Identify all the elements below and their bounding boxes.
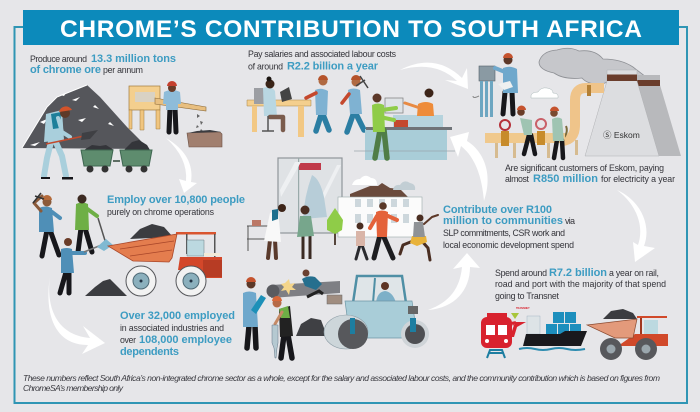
- text: community contribution: SLP commitments, CSR work and: [443, 228, 565, 238]
- counter: [354, 98, 455, 160]
- miner with shovel, blue shirt: [60, 238, 113, 293]
- text: community contribution: via: [565, 216, 575, 226]
- text: Eskom spend: almost: [505, 174, 530, 184]
- panel: [473, 66, 495, 117]
- ore cart 2: [113, 140, 152, 172]
- Eskom logo: Ⓢ Eskom: [603, 130, 640, 140]
- illustration: family and running child: [356, 202, 438, 260]
- text: logistics spend: road and port with the majority of that spend: [495, 279, 666, 289]
- text: salaries: [248, 49, 397, 72]
- text: Eskom spend: Are significant customers of Eskom, paying: [505, 163, 664, 173]
- illustration: three miners: [33, 193, 113, 293]
- text: associated employment: dependents: [120, 346, 179, 358]
- text: employment: [107, 194, 245, 217]
- tree: [327, 208, 343, 245]
- illustration: conveyor and worker with crate: [129, 81, 222, 147]
- text: chrome ore production: per annum: [103, 65, 143, 75]
- text: Eskom spend: for electricity a year: [601, 174, 675, 184]
- blue overall worker: [306, 75, 329, 131]
- miner with pick: [342, 75, 368, 132]
- illustration: cloud of smoke: [539, 48, 650, 84]
- text: chrome ore production: [30, 53, 176, 76]
- illustration: small white cloud: [531, 88, 558, 98]
- child in green dress: [297, 206, 314, 259]
- illustration: Transnet train: TRANSNET: [516, 307, 530, 310]
- text: chrome ore production: of chrome ore: [30, 64, 101, 76]
- arrows between stages: [48, 63, 655, 354]
- worker at right valve: [550, 106, 564, 158]
- text: Eskom spend: R850 million: [533, 173, 598, 185]
- person with jackhammer: [272, 296, 293, 358]
- text: logistics spend: Spend around: [495, 268, 547, 278]
- text: salaries: of around: [248, 62, 283, 72]
- illustration: school building with tree: [327, 176, 422, 245]
- ore pile behind roller: [296, 318, 327, 336]
- text: associated employment: over: [120, 335, 136, 345]
- text: associated employment: [120, 310, 235, 358]
- illustration: Eskom cooling towers: [585, 70, 681, 156]
- text: community contribution: [443, 204, 575, 250]
- miner with pick: [33, 193, 60, 256]
- text: community contribution: million to communities: [443, 215, 563, 227]
- footnote: [23, 373, 660, 393]
- man with clipboard: [243, 277, 266, 348]
- text: logistics spend: [495, 267, 666, 301]
- text: logistics spend: R7.2 billion: [549, 267, 607, 279]
- text: community contribution: Contribute over R100: [443, 204, 552, 216]
- title banner: CHROME’S CONTRIBUTION TO SOUTH AFRICA: [60, 16, 642, 43]
- seated worker: [254, 76, 292, 131]
- text: chrome ore production: Produce around: [30, 54, 87, 64]
- footnote: ChromeSA’s membership only: [23, 383, 124, 393]
- orange worker: [405, 88, 434, 116]
- text: salaries: Pay salaries and associated labour costs: [248, 49, 397, 59]
- text: associated employment: in associated industries and: [120, 323, 224, 333]
- text: Eskom spend: [505, 163, 675, 185]
- text: logistics spend: a year on rail,: [609, 268, 659, 278]
- text: associated employment: 108,000 employee: [139, 334, 232, 346]
- title banner: [23, 10, 679, 45]
- text: employment: Employ over 10,800 people: [107, 194, 245, 206]
- illustration: orange mining truck: [108, 224, 222, 296]
- miner in green: [75, 194, 107, 252]
- illustration: clinic glass building with nurse and child: [247, 158, 342, 259]
- adult in orange: [370, 202, 397, 258]
- text: associated employment: Over 32,000 employed: [120, 310, 235, 322]
- running child: [400, 214, 438, 260]
- worker with clipboard: [495, 53, 518, 114]
- illustration: small orange truck: [587, 309, 668, 360]
- small child: [356, 222, 367, 259]
- illustration: ore heap with miner and carts: [22, 85, 152, 180]
- nurse: [264, 204, 286, 258]
- illustration: road roller with driver: [324, 276, 429, 349]
- footnote: These numbers reflect South Africa’s non-integrated chrome sector as a whole, except for the salary and associated labour costs, and the community contribution which is based on figures from: [23, 373, 660, 383]
- pipe with spark and welder: [266, 270, 342, 304]
- illustration: pipework with valves and workers: [485, 85, 604, 158]
- illustration: container ship: [519, 312, 587, 350]
- text: community contribution: local economic development spend: [443, 240, 574, 250]
- worker at left valve: [517, 106, 535, 154]
- green worker: [372, 94, 396, 158]
- text: chrome ore production: 13.3 million tons: [91, 53, 176, 65]
- illustration: office desk with seated worker and two workers: [247, 75, 455, 160]
- equipment trolley: [247, 220, 269, 251]
- text: logistics spend: going to Transnet: [495, 291, 560, 301]
- text: employment: purely on chrome operations: [107, 207, 215, 217]
- illustration: pipe welding and roadworks crew: [243, 270, 342, 358]
- miner with shovel: [41, 106, 98, 180]
- ore cart 1: [81, 145, 114, 172]
- illustration: Eskom control panel and worker: [473, 53, 518, 117]
- text: salaries: R2.2 billion a year: [287, 60, 379, 72]
- desk: [247, 100, 311, 137]
- ore pile on ground: [85, 279, 127, 296]
- illustration: Transnet train: [481, 307, 530, 358]
